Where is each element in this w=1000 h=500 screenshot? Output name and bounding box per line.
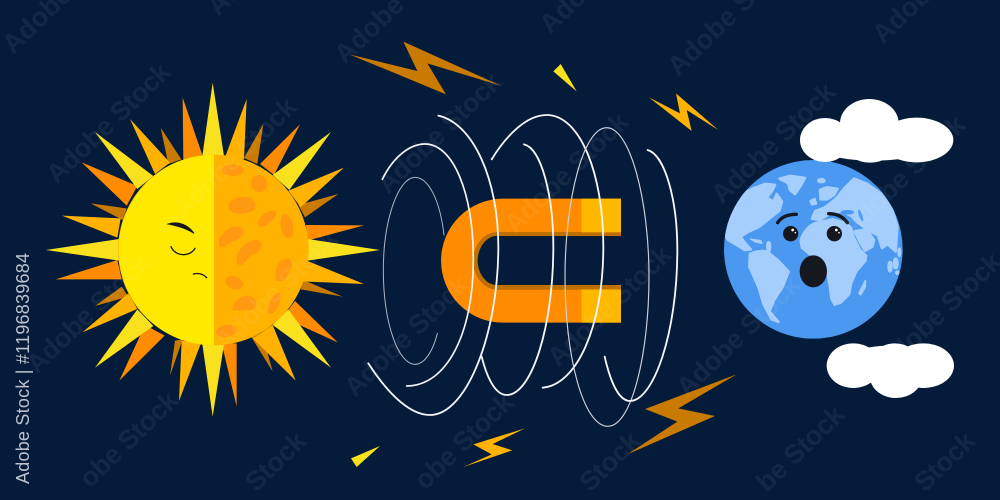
Earth bbox=[723, 99, 954, 398]
cloud: bottom bbox=[827, 343, 954, 398]
watermark: repeated Adobe Stock: Adobe Stock bbox=[371, 66, 508, 199]
magnet bbox=[441, 199, 621, 323]
side credit text: Adobe Stock | #1196839684 bbox=[13, 253, 33, 484]
watermark: repeated Adobe Stock: Stock bbox=[239, 425, 313, 497]
sun rays: orange bbox=[56, 98, 364, 407]
magnetic field lines bbox=[368, 115, 677, 426]
magnet inner shadow bbox=[473, 232, 621, 289]
sun rays: yellow bbox=[46, 83, 380, 417]
continents bbox=[723, 176, 900, 322]
watermark: repeated Adobe Stock: Adobe Stock bbox=[208, 223, 345, 356]
watermark: repeated Adobe Stock: Stock bbox=[908, 425, 982, 497]
sun disc bbox=[118, 155, 309, 345]
Earth face bbox=[778, 214, 847, 287]
watermark: repeated Adobe Stock: Adobe Stock bbox=[541, 239, 678, 372]
watermark: repeated Adobe Stock: Adobe Stock bbox=[20, 246, 157, 379]
watermark: repeated Adobe Stock: Adobe Stock bbox=[40, 56, 177, 189]
watermark: repeated Adobe Stock: Adobe Stock bbox=[835, 109, 972, 242]
watermark: repeated Adobe Stock: Adobe Stock bbox=[705, 76, 842, 209]
sun rays: dark bbox=[91, 124, 343, 376]
sun spots bbox=[217, 166, 294, 338]
sun rays: amber bbox=[62, 99, 364, 401]
watermark: repeated Adobe Stock: Adobe Stock bbox=[498, 106, 635, 239]
inland seas bbox=[820, 200, 864, 222]
watermark: repeated Adobe Stock: obe Stock bbox=[408, 386, 520, 495]
sun face bbox=[168, 223, 207, 278]
watermark: repeated Adobe Stock: Adobe Stock bbox=[166, 91, 303, 224]
cloud: top bbox=[800, 99, 953, 163]
watermark: repeated Adobe Stock: Adobe Stock bbox=[338, 269, 475, 402]
lightning bolts: top bbox=[349, 42, 718, 131]
magnet tips bbox=[582, 199, 621, 323]
watermark: repeated Adobe Stock: obe Stock bbox=[73, 384, 185, 493]
watermark: repeated Adobe Stock: Adobe Stock bbox=[670, 269, 807, 402]
lightning bolts: bottom bbox=[351, 374, 737, 467]
watermark: repeated Adobe Stock: be Stock bbox=[750, 399, 851, 497]
sun bbox=[46, 83, 380, 417]
watermark: repeated Adobe Stock: Stock bbox=[573, 425, 647, 497]
